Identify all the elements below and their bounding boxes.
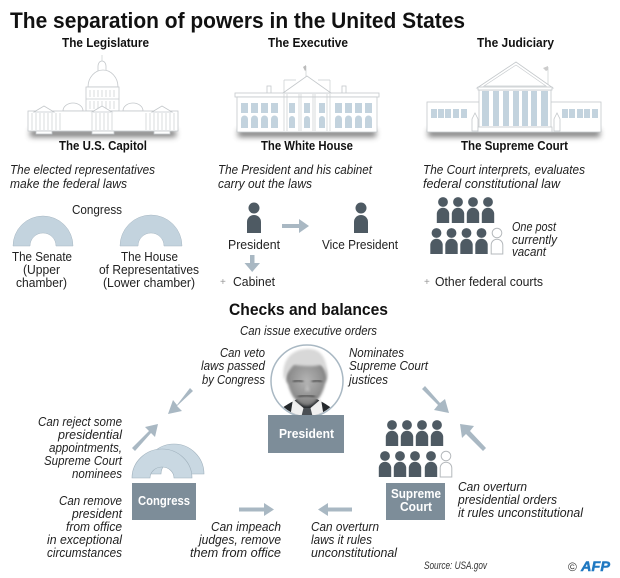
label: the house of representatives: (Lower chamber) — [103, 276, 195, 290]
title: The separation of powers in the United States — [10, 8, 465, 33]
icon: Supreme Court — [427, 62, 601, 137]
icon: White House — [235, 65, 379, 137]
label: the senate: chamber) — [16, 276, 67, 290]
text: can impeach judges — [190, 520, 281, 560]
icon: senate chamber — [13, 216, 73, 246]
logo: AFP — [568, 558, 611, 574]
logo: AFP: AFP — [580, 558, 611, 574]
icon: congress chambers — [132, 444, 204, 478]
text: can reject: Can reject some — [38, 415, 122, 429]
text: can overturn presidential orders: it rules unconstitutional — [458, 506, 584, 520]
text: can overturn laws: laws it rules — [311, 533, 372, 547]
text: can remove president: circumstances — [47, 546, 122, 560]
description: executive: The President and his cabinet — [218, 163, 372, 177]
note: one post vacant: currently — [512, 233, 558, 247]
icon: supreme court justices — [379, 420, 452, 477]
box: president: President — [279, 427, 335, 441]
text: can veto: by Congress — [202, 373, 265, 387]
label: cabinet: Cabinet — [233, 275, 276, 289]
note: one post vacant: One post — [512, 220, 556, 234]
note: one post vacant — [512, 220, 558, 259]
text: can overturn laws — [311, 520, 398, 560]
text: can issue executive orders: Can issue executive orders — [240, 324, 377, 338]
caption: the white house: The White House — [261, 139, 353, 153]
label: the house of representatives — [99, 250, 199, 290]
icon: U.S. Capitol — [28, 55, 178, 137]
label: vice president: Vice President — [322, 238, 398, 252]
text: can remove president: Can remove — [59, 494, 122, 508]
box: supreme court: Supreme — [391, 487, 441, 501]
text: can overturn laws: unconstitutional — [311, 546, 398, 560]
label: the senate: The Senate — [12, 250, 72, 264]
text: can remove president: in exceptional — [47, 533, 123, 547]
arrow: supreme court to president — [460, 424, 486, 451]
description: judiciary: federal constitutional law — [423, 177, 561, 191]
portrait: president — [271, 345, 343, 418]
description: legislature: The elected representatives — [10, 163, 155, 177]
box: congress: Congress — [138, 494, 190, 508]
arrow: president to supreme court — [422, 386, 449, 413]
text: nominates supreme court justices — [347, 346, 428, 387]
description: executive: carry out the laws — [218, 177, 312, 191]
arrow: president to vice president — [282, 219, 309, 233]
heading: checks and balances: Checks and balances — [229, 301, 388, 319]
text: nominates supreme court justices: justices — [347, 373, 388, 387]
description: judiciary — [423, 163, 585, 191]
box: supreme court — [386, 483, 445, 520]
text: can reject: nominees — [72, 467, 122, 481]
description: executive — [218, 163, 372, 191]
arrow: supreme court to congress — [318, 503, 352, 516]
text: can reject — [38, 415, 123, 481]
heading: the executive: The Executive — [268, 36, 348, 50]
text: can reject: presidential — [57, 428, 123, 442]
panel: the judiciary — [423, 36, 601, 289]
description: legislature: make the federal laws — [10, 177, 127, 191]
description: legislature — [10, 163, 155, 191]
note: one post vacant: vacant — [512, 245, 546, 259]
text: can veto — [201, 346, 266, 387]
text: can reject: Supreme Court — [44, 454, 122, 468]
text: can overturn presidential orders: Can overturn — [458, 480, 527, 494]
text: can overturn presidential orders: presidential orders — [457, 493, 557, 507]
description: judiciary: The Court interprets, evaluates — [423, 163, 585, 177]
icon: house chamber — [120, 215, 182, 246]
box: supreme court: Court — [400, 500, 433, 514]
label: cabinet: + — [220, 277, 226, 288]
heading: the legislature: The Legislature — [62, 36, 149, 50]
text: can overturn laws: Can overturn — [311, 520, 379, 534]
text: can reject: appointments, — [49, 441, 122, 455]
arrow: president to congress — [168, 388, 193, 414]
arrow: congress to supreme court — [239, 503, 274, 516]
text: can overturn presidential orders — [457, 480, 584, 520]
caption: the U.S. Capitol: The U.S. Capitol — [59, 139, 147, 153]
text: can veto: laws passed — [201, 359, 266, 373]
logo: AFP: © — [568, 560, 577, 574]
source: Source: USA.gov — [424, 560, 488, 572]
icon: president figure — [247, 202, 261, 233]
label: the house of representatives: of Representatives — [99, 263, 199, 277]
box: congress — [132, 483, 196, 520]
text: can remove president: from office — [66, 520, 122, 534]
label: the house of representatives: The House — [121, 250, 178, 264]
label: the senate — [12, 250, 72, 290]
panel: the executive — [218, 36, 398, 289]
text: can impeach judges: judges, remove — [197, 533, 281, 547]
box: president — [268, 415, 344, 453]
label: other federal courts: + — [424, 277, 430, 288]
arrow: president to cabinet — [244, 255, 260, 272]
arrow: congress to president — [132, 424, 158, 451]
text: nominates supreme court justices: Nominates — [349, 346, 404, 360]
label: other federal courts: Other federal courts — [435, 275, 543, 289]
heading: the judiciary: The Judiciary — [477, 36, 554, 50]
panel: the legislature — [10, 36, 199, 290]
text: can impeach judges: Can impeach — [211, 520, 281, 534]
caption: the supreme court: The Supreme Court — [461, 139, 569, 153]
text: nominates supreme court justices: Supreme Court — [349, 359, 428, 373]
icon: vice president figure — [354, 202, 368, 233]
text: can remove president — [47, 494, 123, 560]
text: can remove president: president — [71, 507, 122, 521]
text: can veto: Can veto — [220, 346, 265, 360]
label: president: President — [228, 238, 281, 252]
text: can impeach judges: them from office — [190, 546, 281, 560]
label: the senate: (Upper — [23, 263, 60, 277]
label: congress: Congress — [72, 203, 122, 217]
icon: nine justices — [430, 197, 503, 254]
